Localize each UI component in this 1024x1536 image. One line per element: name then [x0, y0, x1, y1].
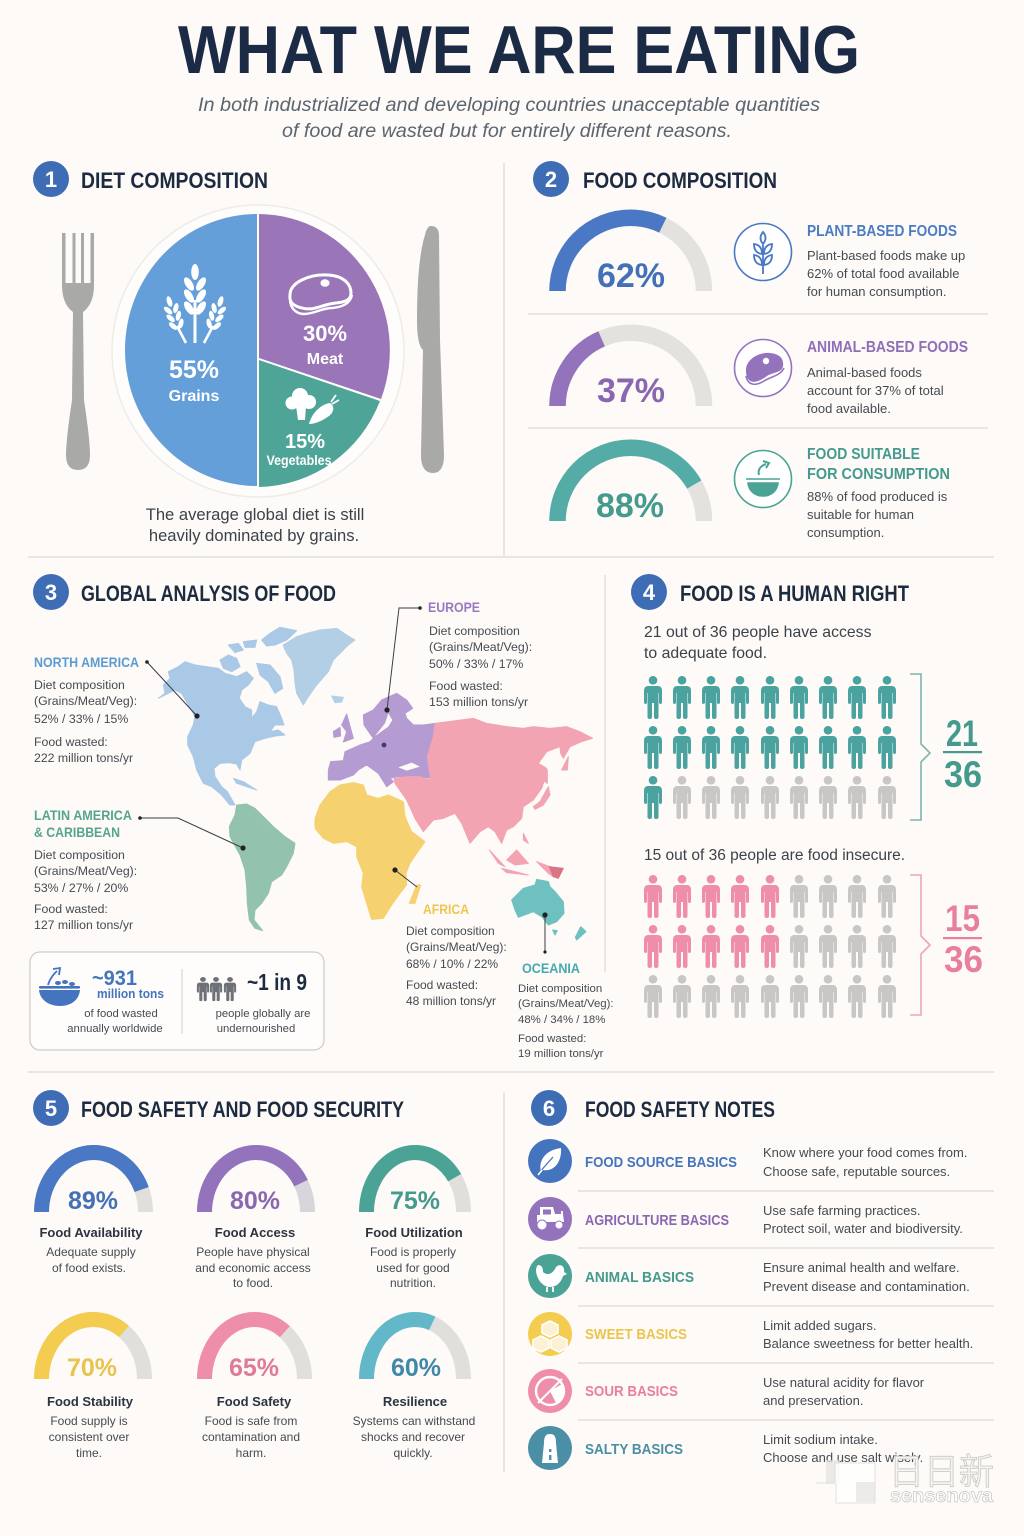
gauge card: food safety: Food Safety — [217, 1394, 292, 1409]
fraction: 15/36: 15 — [945, 898, 980, 939]
gauge card: food safety: contamination and — [202, 1430, 300, 1444]
label: vegetables: Vegetables — [266, 453, 332, 468]
text: animal-based foods: Animal-based foods — [807, 365, 922, 380]
gauge card: food safety: 65% — [229, 1354, 279, 1382]
icon: three people — [197, 977, 236, 1001]
gauge card: food stability: Food supply is — [50, 1414, 128, 1428]
label: latin america: 127 million tons/yr — [34, 918, 133, 932]
gauge card: food stability: 70% — [67, 1354, 117, 1382]
gauge card: resilience: 60% — [391, 1354, 441, 1382]
map: north america — [158, 627, 297, 805]
gauge card: resilience: Resilience — [383, 1394, 447, 1409]
label: vegetables: 15% — [285, 431, 325, 453]
caption: heavily dominated by grains. — [149, 526, 359, 545]
watermark: sensenova: sensenova — [890, 1486, 993, 1507]
pie slice: meat 30% — [259, 214, 390, 399]
stat: undernourished: undernourished — [217, 1023, 295, 1035]
text: food suitable for consumption: suitable for human — [807, 507, 914, 522]
heading: safety notes: 6 — [543, 1096, 555, 1121]
gauge card: food safety: harm. — [236, 1446, 266, 1460]
note: animal: Ensure animal health and welfare. — [763, 1260, 960, 1275]
label: grains: 55% — [169, 356, 219, 384]
world map — [158, 627, 593, 940]
stat: food wasted: ~931 — [92, 967, 137, 990]
text: food suitable for consumption: FOR CONSUMPTION — [807, 466, 950, 483]
gauge card: food utilization: Food Utilization — [365, 1225, 463, 1240]
note: food source — [528, 1139, 967, 1183]
icon: knife — [417, 226, 444, 473]
label: africa: 48 million tons/yr — [406, 994, 496, 1008]
label: latin america: 53% / 27% / 20% — [34, 881, 128, 895]
text: food suitable for consumption — [807, 446, 950, 540]
map: europe inland seas — [375, 713, 420, 771]
stat: food wasted — [67, 967, 164, 1035]
gauge: plant-based 62%: 62% — [597, 257, 665, 295]
icon: fork — [62, 231, 94, 470]
label: europe: 50% / 33% / 17% — [429, 657, 523, 671]
heading: food composition: FOOD COMPOSITION — [583, 168, 777, 193]
heading: human right: FOOD IS A HUMAN RIGHT — [680, 581, 909, 606]
heading: global analysis: GLOBAL ANALYSIS OF FOOD — [81, 581, 336, 606]
icon: wheat — [159, 264, 231, 343]
map: europe — [328, 693, 435, 787]
stat: undernourished — [216, 969, 310, 1035]
gauge card: food safety: Food is safe from — [205, 1414, 297, 1428]
gauge card: food stability: consistent over — [49, 1430, 129, 1444]
fraction: 21/36 — [943, 713, 982, 795]
label: meat: Meat — [307, 351, 344, 368]
text: animal-based foods — [807, 339, 968, 416]
heading: diet composition: DIET COMPOSITION — [81, 168, 268, 193]
icon: food bowl — [39, 968, 80, 1006]
gauge card: food availability: Adequate supply — [46, 1245, 136, 1259]
label: europe: EUROPE — [428, 599, 480, 615]
note: sour: and preservation. — [763, 1393, 863, 1408]
map: oceania — [512, 879, 586, 940]
note: food source: Know where your food comes from. — [763, 1145, 967, 1160]
icon: broccoli and carrot — [286, 388, 339, 424]
note: animal: Prevent disease and contamination. — [763, 1279, 970, 1294]
heading: diet composition — [33, 161, 268, 197]
label: oceania: OCEANIA — [522, 960, 580, 976]
note: salty: Limit sodium intake. — [763, 1432, 878, 1447]
text: plant-based foods: 62% of total food available — [807, 266, 960, 281]
text: food suitable for consumption: FOOD SUITABLE — [807, 446, 920, 463]
label: latin america: (Grains/Meat/Veg): — [34, 864, 137, 878]
watermark: sensenova — [816, 1443, 994, 1507]
map: south america — [229, 804, 295, 931]
label: africa: AFRICA — [423, 901, 469, 917]
text: plant-based foods: Plant-based foods make up — [807, 248, 965, 263]
label: latin america: Diet composition — [34, 848, 125, 862]
gauge card: resilience: quickly. — [393, 1446, 433, 1460]
heading: safety notes — [531, 1090, 775, 1126]
pictogram: 21 of 36 — [644, 676, 896, 819]
text: access — [644, 624, 872, 662]
subtitle: of food are wasted but for entirely different reasons. — [282, 120, 732, 142]
heading: food composition: 2 — [545, 167, 557, 192]
note: sour — [528, 1369, 925, 1413]
bracket: teal — [910, 674, 930, 820]
icon: steak — [290, 275, 352, 314]
heading: global analysis: 3 — [45, 580, 57, 605]
caption — [146, 505, 364, 545]
gauge card: food utilization: nutrition. — [390, 1276, 436, 1290]
gauge card: food availability — [39, 1153, 146, 1275]
note: sour: Use natural acidity for flavor — [763, 1375, 925, 1390]
label: latin america: & CARIBBEAN — [34, 824, 120, 840]
label: north america: Diet composition — [34, 678, 125, 692]
heading: safety and security: FOOD SAFETY AND FOOD SECURITY — [81, 1097, 404, 1122]
text: plant-based foods: for human consumption. — [807, 284, 946, 299]
label: europe: Diet composition — [429, 624, 520, 638]
gauge card: food availability: of food exists. — [52, 1261, 126, 1275]
panel: food safety and food security — [33, 1090, 475, 1460]
label: vegetables — [266, 431, 332, 468]
map: greenland — [283, 628, 355, 705]
note: agriculture — [528, 1197, 963, 1241]
label: north america: 222 million tons/yr — [34, 751, 133, 765]
label: grains — [169, 356, 219, 405]
title: WHAT WE ARE EATING — [178, 12, 860, 88]
label: europe: Food wasted: — [429, 679, 503, 693]
caption: The average global diet is still — [146, 505, 364, 524]
heading: safety and security — [33, 1090, 404, 1126]
heading: safety and security: 5 — [45, 1096, 57, 1121]
stat: undernourished: ~1 in 9 — [247, 969, 307, 995]
note: animal — [528, 1254, 970, 1298]
heading: human right — [631, 574, 909, 610]
fraction: 15/36 — [943, 898, 983, 980]
label: oceania: (Grains/Meat/Veg): — [518, 998, 614, 1010]
gauge card: food utilization — [365, 1153, 464, 1290]
note: food source: Choose safe, reputable sources. — [763, 1164, 950, 1179]
heading: food composition — [533, 161, 777, 197]
text: animal-based foods: ANIMAL-BASED FOODS — [807, 339, 968, 356]
heading: safety notes: FOOD SAFETY NOTES — [585, 1097, 775, 1122]
leader lines — [138, 606, 548, 954]
label: oceania: 48% / 34% / 18% — [518, 1014, 605, 1026]
gauge card: resilience — [353, 1320, 475, 1460]
text: food suitable for consumption: consumption. — [807, 525, 884, 540]
text: food suitable for consumption: 88% of food produced is — [807, 489, 948, 504]
gauge: suitable 88%: 88% — [596, 487, 664, 525]
note: salty: SALTY BASICS — [585, 1441, 683, 1458]
label: oceania: Diet composition — [518, 983, 602, 995]
label: grains: Grains — [169, 388, 219, 405]
fraction: 15/36: 36 — [944, 939, 983, 980]
stat: food wasted: annually worldwide — [67, 1023, 163, 1035]
gauge: animal-based 37% — [558, 333, 704, 410]
text: access: 21 out of 36 people have access — [644, 624, 872, 641]
label: africa: (Grains/Meat/Veg): — [406, 940, 507, 954]
panel: diet composition — [33, 161, 444, 545]
plate — [112, 205, 404, 497]
note: animal: ANIMAL BASICS — [585, 1269, 694, 1286]
gauge card: food availability: Food Availability — [39, 1225, 143, 1240]
label: latin america: LATIN AMERICA — [34, 807, 132, 823]
note: sweet: Balance sweetness for better health. — [763, 1336, 973, 1351]
note: agriculture: Protect soil, water and biodiversity. — [763, 1221, 963, 1236]
fraction: 21/36: 36 — [944, 754, 982, 795]
watermark: sensenova: 日日新 — [889, 1443, 994, 1495]
gauge card: food stability: time. — [76, 1446, 102, 1460]
gauge: suitable 88% — [558, 448, 704, 525]
gauge card: food utilization: 75% — [390, 1187, 440, 1215]
text: plant-based foods — [807, 223, 965, 299]
panel: global analysis of food — [30, 574, 614, 1060]
label: oceania: 19 million tons/yr — [518, 1048, 604, 1060]
note: food source: FOOD SOURCE BASICS — [585, 1154, 737, 1171]
label: north america: (Grains/Meat/Veg): — [34, 694, 137, 708]
map: asia — [394, 718, 593, 878]
label: north america — [34, 654, 139, 765]
gauge card: food access: and economic access — [195, 1261, 311, 1275]
gauge card: resilience: Systems can withstand — [353, 1414, 475, 1428]
icon: bowl — [734, 450, 792, 508]
label: meat: 30% — [303, 321, 347, 346]
text: animal-based foods: account for 37% of total — [807, 383, 944, 398]
subtitle: In both industrialized and developing countries unacceptable quantities — [198, 94, 820, 116]
label: europe — [428, 599, 532, 709]
pie slice: vegetables 15% — [259, 360, 380, 487]
icon: plant — [734, 224, 792, 280]
label: oceania — [518, 960, 614, 1060]
label: africa — [406, 901, 507, 1008]
label: europe: 153 million tons/yr — [429, 695, 528, 709]
map: africa — [315, 783, 425, 919]
gauge card: food access: People have physical — [196, 1245, 310, 1259]
subtitle — [198, 94, 820, 142]
gauge card: food safety — [202, 1320, 304, 1460]
gauge: plant-based 62% — [558, 218, 704, 295]
gauge card: food access: to food. — [233, 1276, 273, 1290]
note: sweet: Limit added sugars. — [763, 1318, 876, 1333]
label: latin america: Food wasted: — [34, 902, 108, 916]
text: plant-based foods: PLANT-BASED FOODS — [807, 223, 957, 240]
label: meat — [303, 321, 347, 368]
note: salty — [528, 1426, 923, 1470]
label: africa: 68% / 10% / 22% — [406, 957, 498, 971]
pie chart: grains, meat, vegetables — [125, 214, 390, 487]
label: north america: NORTH AMERICA — [34, 654, 139, 670]
label: north america: 52% / 33% / 15% — [34, 712, 128, 726]
gauge card: food stability: Food Stability — [47, 1394, 134, 1409]
note: sweet — [528, 1312, 973, 1356]
label: africa: Food wasted: — [406, 978, 478, 992]
heading: human right: 4 — [643, 580, 656, 605]
label: oceania: Food wasted: — [518, 1033, 586, 1045]
note: sweet: SWEET BASICS — [585, 1326, 687, 1343]
note: agriculture: AGRICULTURE BASICS — [585, 1212, 729, 1229]
gauge card: food access: 80% — [230, 1187, 280, 1215]
gauge: animal-based 37%: 37% — [597, 372, 665, 410]
text: animal-based foods: food available. — [807, 401, 891, 416]
gauge card: resilience: shocks and recover — [361, 1430, 465, 1444]
label: africa: Diet composition — [406, 924, 495, 938]
panel: food safety notes — [528, 1090, 994, 1470]
label: north america: Food wasted: — [34, 735, 108, 749]
text: access: to adequate food. — [644, 645, 767, 662]
stat: undernourished: people globally are — [216, 1008, 310, 1020]
gauge card: food stability — [42, 1320, 144, 1460]
gauge card: food utilization: used for good — [376, 1261, 450, 1275]
gauge card: food utilization: Food is properly — [370, 1245, 456, 1259]
note: agriculture: Use safe farming practices. — [763, 1203, 921, 1218]
text: insecure: 15 out of 36 people are food insecure. — [644, 847, 905, 864]
gauge card: food access: Food Access — [215, 1225, 295, 1240]
icon: meat — [734, 340, 792, 396]
panel: food is a human right — [631, 574, 983, 1018]
label: latin america — [34, 807, 137, 932]
gauge card: food availability: 89% — [68, 1187, 118, 1215]
heading: diet composition: 1 — [45, 167, 57, 192]
stat: food wasted: million tons — [97, 986, 164, 1001]
pictogram: 15 of 36 — [644, 875, 896, 1018]
note: sour: SOUR BASICS — [585, 1383, 678, 1400]
stat: food wasted: of food wasted — [84, 1008, 158, 1020]
label: europe: (Grains/Meat/Veg): — [429, 640, 532, 654]
note: salty: Choose and use salt wisely. — [763, 1450, 923, 1465]
gauge card: food access — [195, 1153, 311, 1290]
heading: global analysis — [33, 574, 336, 610]
callout: global totals — [30, 952, 324, 1050]
pie slice: grains 55% — [125, 214, 257, 486]
fraction: 21/36: 21 — [946, 713, 978, 754]
panel: food composition — [528, 161, 988, 540]
bracket: pink — [910, 875, 930, 1015]
